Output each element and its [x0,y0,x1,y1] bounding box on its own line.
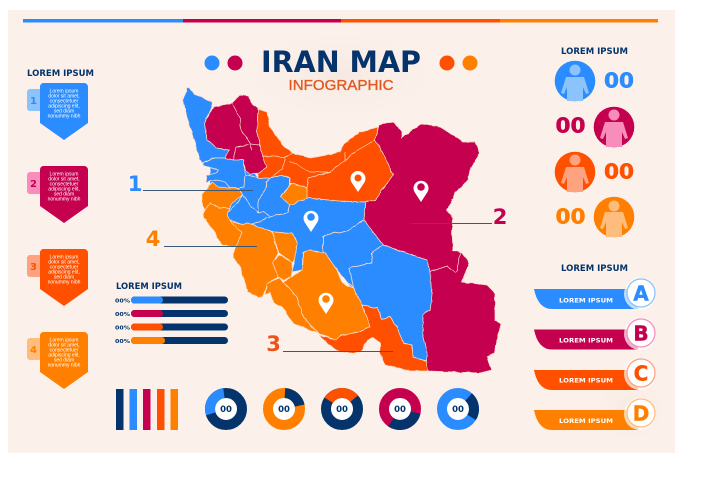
option B: LOREM IPSUM [559,336,613,344]
panel: card 4 [27,332,88,389]
Iran map [183,88,501,373]
panel: progress bars: LOREM IPSUM [116,281,182,291]
value orange: 00 [556,204,586,228]
donut 4 [380,389,420,429]
callout 4 [146,227,257,251]
title: INFOGRAPHIC [288,77,394,94]
panel: card 4: consectetuer [50,348,79,354]
heading: people: LOREM IPSUM [561,46,628,56]
option C: LOREM IPSUM [559,376,613,384]
donut 1: 00 [220,405,232,415]
panel: card 3: 3 [30,262,37,273]
heading: options: LOREM IPSUM [561,263,628,273]
option D: D [633,402,649,426]
panel: card 3 [27,249,88,306]
option D [534,398,656,430]
option D: LOREM IPSUM [559,417,613,425]
panel: card 1: 1 [30,96,37,107]
callout 2: 2 [493,205,507,229]
panel: card 1: Lorem ipsum [50,88,78,94]
title [261,45,421,94]
icon: person red-orange [555,152,595,192]
icon: map pin south [318,293,334,314]
panel: card 4: Lorem ipsum [50,338,78,344]
region: crimson northwest provinces [205,95,267,175]
region: red-orange southern province [318,305,428,371]
icon: map pin center [304,211,319,232]
panel: card 2: nonummy nibh [48,196,81,202]
panel: progress bars [115,281,228,345]
panel: card 3: sed diam [54,274,74,280]
donut 2 [267,392,301,426]
icon: person crimson [594,107,634,147]
panel: card 4: adipiscing elit, [48,352,80,358]
panel: card 2: 2 [30,179,37,190]
bar 2: 00% [115,312,131,318]
base: blue interior [210,160,432,361]
icon: map pin north [351,171,366,192]
callout 1 [128,172,253,196]
callout 2 [411,205,507,229]
donut 5: 00 [452,405,464,415]
title dots [204,56,478,70]
panel: card 3: nonummy nibh [48,280,81,286]
panel: card 4: dolor sit amet, [48,342,80,348]
panel: card 1 [27,83,88,140]
region: central blue provinces [227,175,432,361]
panel: card 3: dolor sit amet, [48,260,80,266]
donut 1 [206,389,246,429]
bar 4: 00% [115,339,131,345]
option A: A [633,282,649,306]
value crimson: 00 [556,114,586,138]
option B: B [633,322,649,346]
vertical colour bars [116,389,178,430]
region: crimson eastern provinces [364,122,501,373]
option C [534,358,656,390]
callout 1: 1 [128,172,142,196]
icon: person blue [555,61,595,101]
panel: card 1: sed diam [54,108,74,114]
donut 2: 00 [278,405,290,415]
option A [534,278,656,310]
panel: card 1: dolor sit amet, [48,94,80,100]
callout 4: 4 [146,227,160,251]
icon: map pin east [413,181,429,202]
bar 1: 00% [115,298,131,304]
region: orange southwest provinces [202,182,370,340]
panel: card 4: sed diam [54,358,74,364]
panel: card 4: nonummy nibh [48,362,81,368]
panel: card 2 [27,166,88,223]
panel: card 3: Lorem ipsum [50,254,78,260]
option A: LOREM IPSUM [559,296,613,304]
option B [534,318,656,350]
icon: person orange [594,197,634,237]
callout 3 [266,332,393,356]
value blue: 00 [604,68,634,92]
region: red-orange northern provinces [257,109,393,202]
panel: card 4: 4 [30,345,37,356]
panel: card 2: consectetuer [50,182,79,188]
top colour bar [23,19,658,22]
donut 3: 00 [336,405,348,415]
panel: card 2: adipiscing elit, [48,186,80,192]
heading: left column: LOREM IPSUM [27,68,94,78]
panel: card 2: Lorem ipsum [50,172,78,178]
panel: card 1: consectetuer [50,98,79,104]
option C: C [634,362,648,386]
region: northwest blue provinces [183,88,270,213]
region: orange small central province [281,183,307,205]
panel: card 2: dolor sit amet, [48,176,80,182]
panel: card 1: nonummy nibh [48,114,81,120]
panel: card 1: adipiscing elit, [48,104,80,110]
donut 5 [435,386,481,432]
title: IRAN MAP [261,45,421,79]
panel: card 3: consectetuer [50,264,79,270]
panel: card 2: sed diam [54,192,74,198]
value red-orange: 00 [604,160,634,184]
bar 3: 00% [115,326,131,332]
callout 3: 3 [266,332,281,356]
donut 4: 00 [394,405,406,415]
panel: card 3: adipiscing elit, [48,270,80,276]
donut 3 [320,387,364,431]
